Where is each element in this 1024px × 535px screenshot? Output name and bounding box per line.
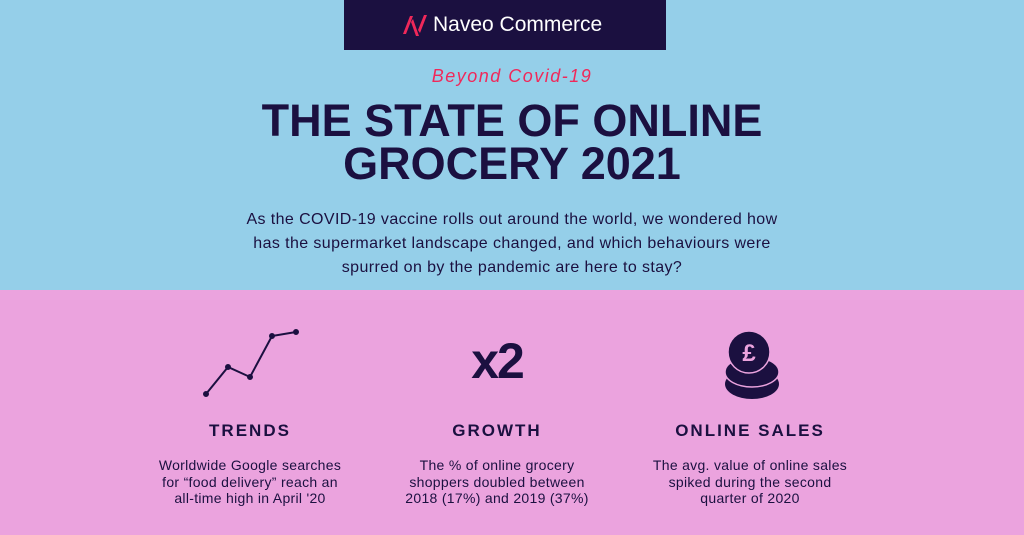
title — [262, 95, 762, 189]
icon: coins — [725, 332, 779, 399]
column: online sales — [653, 421, 847, 506]
logo icon — [403, 15, 427, 36]
column: trends — [159, 421, 341, 506]
column: online sales: quarter of 2020 — [700, 490, 800, 506]
column: growth: GROWTH — [452, 421, 542, 440]
subtitle: Beyond Covid-19 — [432, 66, 592, 86]
column: growth: 2018 (17%) and 2019 (37%) — [405, 490, 589, 506]
column: trends: TRENDS — [209, 421, 291, 440]
column: online sales: spiked during the second — [669, 474, 831, 490]
logo banner — [344, 0, 666, 50]
intro text — [246, 211, 778, 276]
column: trends: Worldwide Google searches — [159, 457, 341, 473]
column: online sales: ONLINE SALES — [675, 421, 825, 440]
column: online sales: The avg. value of online sales — [653, 457, 847, 473]
icon: coins: £ — [742, 340, 756, 367]
intro text: has the supermarket landscape changed, and which behaviours were — [253, 235, 771, 252]
logo text: Naveo Commerce — [433, 13, 602, 36]
title: GROCERY 2021 — [343, 138, 681, 189]
intro text: As the COVID-19 vaccine rolls out around the world, we wondered how — [246, 211, 778, 228]
intro text: spurred on by the pandemic are here to stay? — [342, 259, 682, 276]
column: growth — [405, 421, 589, 506]
icon: x2: x2 — [471, 333, 523, 389]
column: growth: The % of online grocery — [420, 457, 574, 473]
icon: trend line — [203, 329, 299, 397]
column: growth: shoppers doubled between — [409, 474, 585, 490]
title: THE STATE OF ONLINE — [262, 95, 762, 146]
column: trends: all-time high in April '20 — [174, 490, 326, 506]
column: trends: for “food delivery” reach an — [162, 474, 338, 490]
